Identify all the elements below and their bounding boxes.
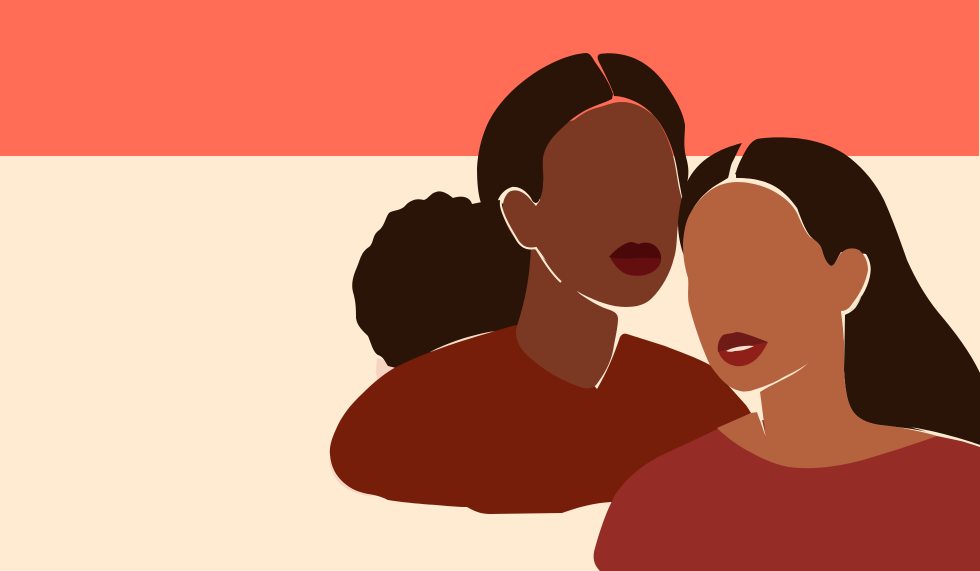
- hair: [477, 53, 688, 203]
- hair small left part: [678, 143, 742, 256]
- neck gap highlight: [738, 391, 766, 437]
- hairline highlight: [690, 174, 798, 220]
- lips: [718, 332, 768, 366]
- ear outline highlight: [841, 252, 870, 335]
- hair left half: [477, 53, 613, 203]
- pink shadow around bun and shirt: [329, 358, 400, 496]
- background: coral band: [0, 0, 979, 156]
- neck: [516, 245, 618, 388]
- neck and chest: [717, 340, 937, 468]
- afro bun: [352, 191, 535, 368]
- face: [503, 102, 682, 307]
- upper lip: [609, 242, 661, 259]
- figure: woman with afro bun: [329, 53, 760, 514]
- ear outline: [501, 187, 561, 282]
- teeth: [726, 346, 754, 352]
- lower lip: [718, 342, 768, 366]
- hair main sweep: [735, 137, 980, 445]
- lower lip: [610, 257, 661, 276]
- shirt: [330, 325, 760, 514]
- jaw highlight: [740, 363, 808, 392]
- shirt: [594, 413, 980, 571]
- shirt collar highlight: [910, 427, 980, 447]
- face: [683, 182, 868, 392]
- hair: [678, 137, 980, 445]
- highlight between bun and shirt: [430, 331, 495, 352]
- upper lip: [718, 332, 768, 352]
- lips: [609, 242, 661, 276]
- hair right half: [598, 53, 688, 197]
- neck side highlight: [841, 311, 844, 335]
- figure: woman in front right: [594, 137, 980, 571]
